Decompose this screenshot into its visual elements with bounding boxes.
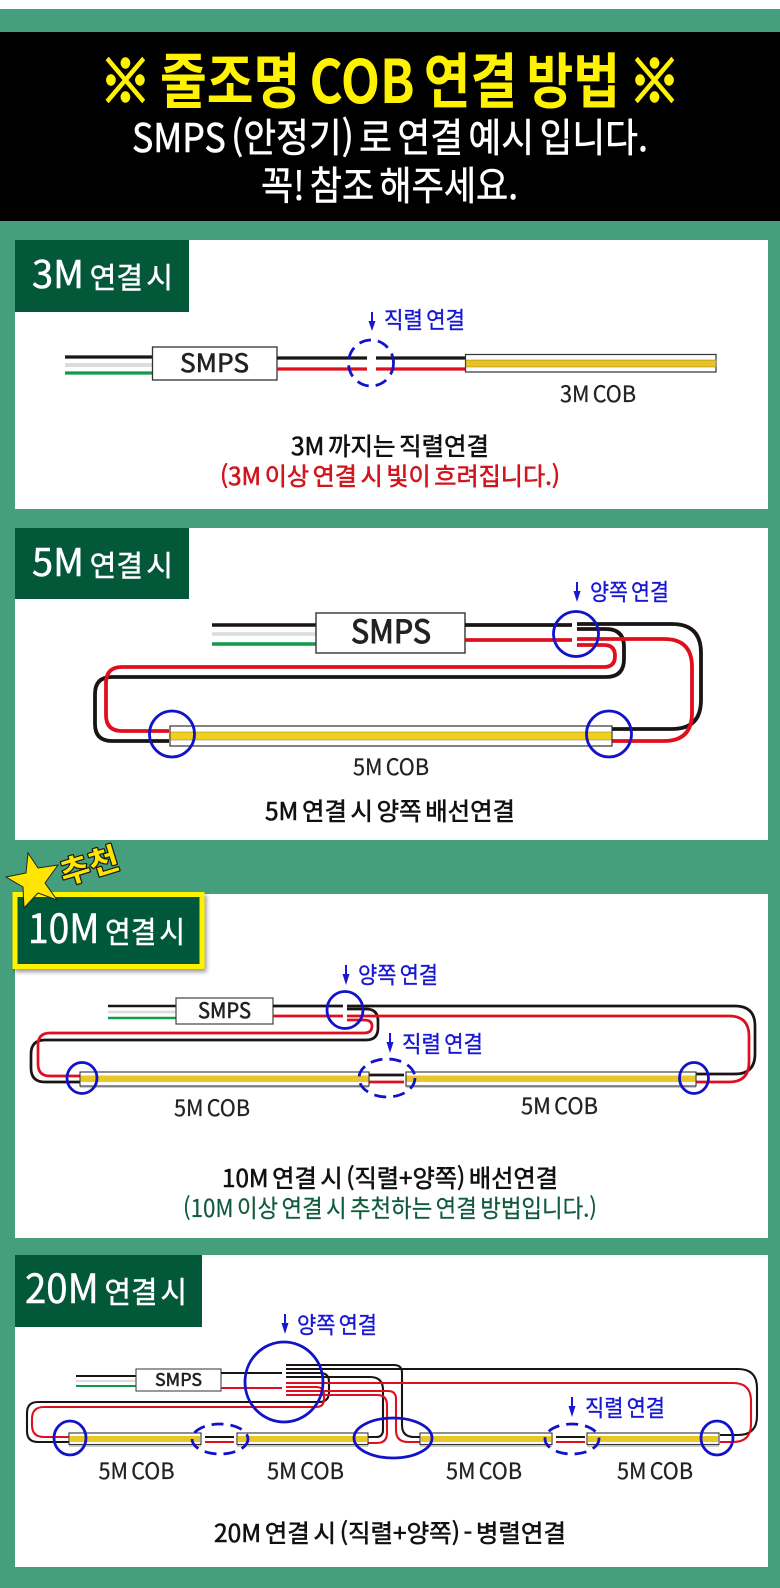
caption: 10M 연결 시 (직렬+양쪽) 배선연결 xyxy=(222,1160,558,1195)
COB labels: 5M COB xyxy=(617,1454,693,1486)
panel: 3M connection xyxy=(15,240,768,509)
annotation: both-side connection: 양쪽 연결 xyxy=(590,573,669,607)
SMPS box: SMPS xyxy=(155,1366,202,1392)
SMPS box: SMPS xyxy=(180,344,249,380)
caption: 20M 연결 시 (직렬+양쪽) - 병렬연결 xyxy=(214,1515,566,1550)
input wires xyxy=(108,1006,176,1018)
warning caption: (3M 이상 연결 시 빛이 흐려집니다.) xyxy=(220,458,560,493)
COB label right: 5M COB xyxy=(521,1089,598,1121)
input wires xyxy=(212,625,316,644)
annotation: both-side connection: 양쪽 연결 xyxy=(358,956,438,990)
COB strip 1 xyxy=(80,1072,369,1088)
annotation: series connection: 직렬 연결 xyxy=(384,301,465,335)
annotation: series connection: 직렬 연결 xyxy=(402,1025,483,1059)
connection circles xyxy=(150,612,632,757)
wiring xyxy=(95,624,701,741)
COB strip xyxy=(466,354,716,372)
tab: 5M xyxy=(15,528,189,599)
tab: 3M: 3M 연결 시 xyxy=(32,244,173,299)
COB labels: 5M COB xyxy=(98,1454,174,1486)
COB strip 2 xyxy=(406,1072,696,1088)
panel: 10M connection xyxy=(6,833,768,1238)
COB label left: 5M COB xyxy=(174,1091,250,1123)
tab: 3M xyxy=(15,240,189,312)
panel: 5M connection xyxy=(15,528,768,840)
COB strip xyxy=(170,726,612,746)
subtitle line 1: SMPS (안정기) 로 연결 예시 입니다. xyxy=(132,107,648,164)
SMPS box xyxy=(176,995,273,1025)
COB labels: 5M COB xyxy=(446,1454,522,1486)
COB label: 3M COB xyxy=(560,377,636,409)
COB label: 5M COB xyxy=(353,750,429,782)
annotation: both-side connection: 양쪽 연결 xyxy=(297,1306,377,1340)
connection circles xyxy=(67,992,708,1094)
dashed circle xyxy=(359,1059,415,1097)
wiring xyxy=(27,1365,757,1443)
title: ※ 줄조명 COB 연결 방법 ※ xyxy=(100,34,680,121)
COB labels xyxy=(98,1454,693,1486)
panel: 20M connection xyxy=(15,1255,768,1567)
dashed circle xyxy=(348,340,394,386)
COB strips xyxy=(69,1433,719,1447)
SMPS box xyxy=(152,344,277,380)
recommendation caption: (10M 이상 연결 시 추천하는 연결 방법입니다.) xyxy=(183,1190,597,1225)
icon: star xyxy=(6,853,58,908)
SMPS box: SMPS xyxy=(198,995,251,1025)
tab: 20M: 20M 연결 시 xyxy=(25,1257,187,1315)
dashed circles xyxy=(192,1424,599,1454)
tab: 10M: 10M 연결 시 xyxy=(28,897,185,955)
tab: 5M: 5M 연결 시 xyxy=(32,532,173,587)
recommended label: 추천 xyxy=(53,833,124,894)
wiring xyxy=(31,1006,755,1082)
caption: 3M 까지는 직렬연결 xyxy=(291,428,489,463)
header banner xyxy=(0,32,780,221)
input wires xyxy=(65,357,152,373)
COB labels: 5M COB xyxy=(267,1454,344,1486)
SMPS box xyxy=(136,1366,221,1392)
SMPS box xyxy=(316,607,465,653)
connection circles xyxy=(54,1342,733,1458)
output wires xyxy=(277,358,465,369)
subtitle line 2: 꼭! 참조 해주세요. xyxy=(261,155,518,212)
SMPS box: SMPS xyxy=(351,607,431,653)
input wires xyxy=(76,1376,136,1386)
caption: 5M 연결 시 양쪽 배선연결 xyxy=(265,793,515,828)
annotation: series connection: 직렬 연결 xyxy=(585,1389,665,1423)
